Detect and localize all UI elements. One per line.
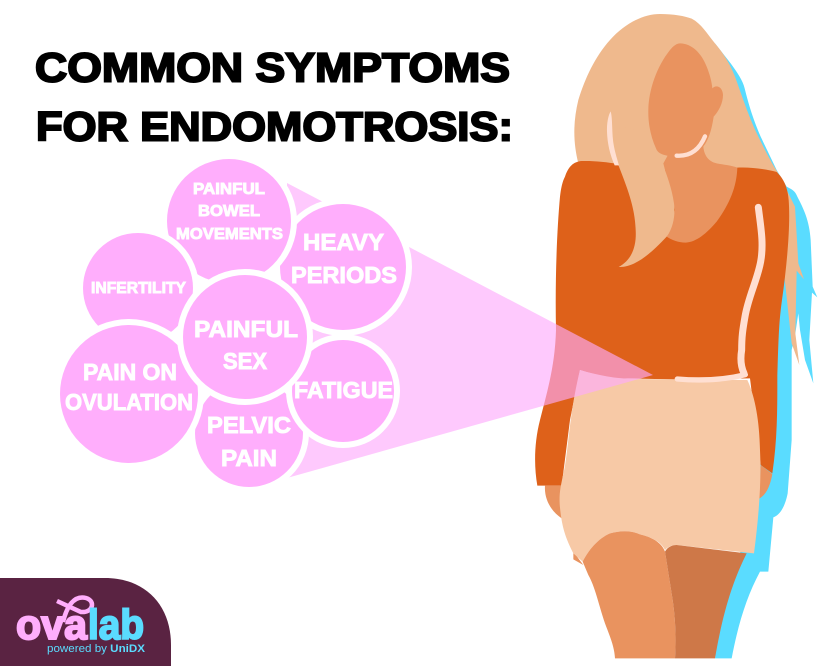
bubble: fatigue [286, 334, 400, 448]
label: pelvic pain [207, 412, 291, 471]
label: painful bowel movements: PAINFUL [193, 181, 265, 198]
skirt [560, 370, 760, 562]
face highlight: hair strand [607, 111, 619, 165]
hair [574, 14, 778, 187]
label: painful bowel movements: MOVEMENTS [176, 226, 283, 243]
title [35, 44, 513, 150]
logo wordmark: ova [16, 601, 88, 648]
label: pelvic pain: PELVIC [207, 412, 291, 438]
magnifier beam [287, 183, 653, 478]
label: pelvic pain: PAIN [221, 445, 277, 471]
bubble: pain on ovulation [54, 319, 204, 469]
logo panel [0, 578, 171, 666]
label: painful bowel movements: BOWEL [198, 203, 260, 220]
label: pain on ovulation: OVULATION [65, 389, 193, 415]
belt highlight [677, 375, 745, 380]
bubble: painful bowel movements [161, 153, 297, 289]
title: FOR ENDOMOTROSIS: [36, 104, 513, 150]
label: painful sex [194, 316, 298, 374]
logo loop [57, 598, 92, 622]
right hand [759, 465, 772, 499]
sweater [535, 161, 789, 486]
label: painful sex: PAINFUL [194, 316, 298, 342]
bubble: heavy periods [274, 198, 412, 336]
right leg [665, 545, 747, 658]
label: pain on ovulation: PAIN ON [83, 359, 177, 385]
arm highlight [741, 207, 762, 373]
hip sliver [573, 552, 583, 565]
bubble cluster [54, 153, 412, 493]
logo tagline: powered by UniDX [47, 643, 146, 655]
woman illustration [535, 14, 817, 658]
front hair lock [610, 127, 674, 267]
label: heavy periods: PERIODS [291, 262, 397, 288]
bubble: infertility [77, 227, 199, 349]
blue shadow behind figure [715, 43, 817, 658]
label: pain on ovulation [65, 359, 193, 415]
neck and chest [663, 113, 737, 243]
label: infertility: INFERTILITY [91, 280, 186, 297]
jaw highlight [677, 136, 705, 156]
logo wordmark [16, 601, 144, 648]
title: COMMON SYMPTOMS [35, 44, 510, 90]
left leg [583, 531, 676, 658]
label: painful bowel movements [176, 181, 283, 243]
label: heavy periods: HEAVY [303, 229, 384, 255]
label: painful sex: SEX [223, 348, 268, 374]
face and ear [648, 43, 723, 157]
label: fatigue: FATIGUE [294, 377, 393, 403]
left hand [545, 486, 562, 518]
hair back strand [783, 187, 804, 365]
bubble: painful sex [177, 269, 313, 405]
bubble: pelvic pain [189, 373, 309, 493]
logo wordmark: lab [88, 601, 144, 648]
label: heavy periods [291, 229, 397, 288]
